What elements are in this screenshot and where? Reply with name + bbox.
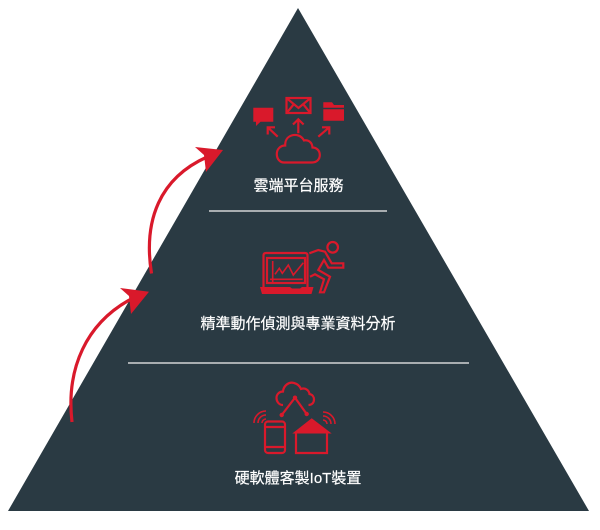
heading: custom IoT hardware: 硬軟體客製IoT裝置 (235, 470, 361, 487)
icon: left wifi (254, 411, 266, 423)
icon: house (292, 418, 332, 453)
icon: IoT hardware (254, 383, 335, 453)
icon: runner body (309, 250, 343, 292)
heading: motion detection and data analysis: 精準動作偵測與專業資料分析 (200, 316, 396, 332)
icon: screen panel (267, 258, 305, 283)
icon: laptop base (260, 287, 314, 294)
icon: cloud (277, 135, 320, 162)
icon: chat bubble (253, 108, 273, 126)
heading: cloud platform services: 雲端平台服務 (253, 178, 344, 194)
icon: envelope (286, 98, 310, 113)
icon: laptop screen (264, 253, 308, 287)
icon: network cloud (276, 383, 314, 405)
icon: network nodes (280, 396, 309, 417)
arrow: lower growth arrow (71, 288, 149, 422)
icon: laptop and runner (260, 242, 343, 294)
icon: right wifi (323, 412, 335, 424)
icon: upload arrows (268, 119, 329, 137)
icon: line chart (270, 261, 303, 282)
arrow: upper growth arrow (149, 147, 223, 274)
icon: runner head (327, 242, 338, 253)
icon: folder (323, 102, 344, 121)
icon: smartphone (265, 422, 285, 453)
icon: cloud platform (253, 98, 344, 162)
